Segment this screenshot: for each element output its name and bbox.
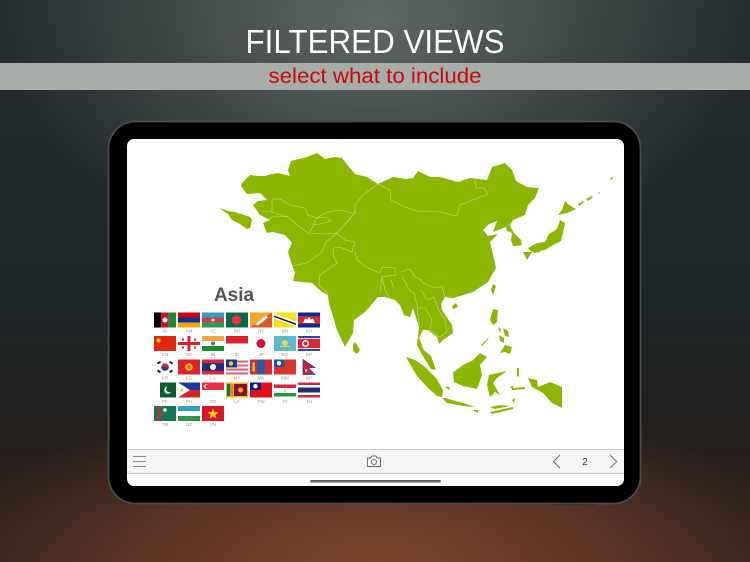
map of Asia <box>219 153 613 414</box>
flag country codes: AF <box>162 328 168 334</box>
Sri Lanka <box>353 342 360 354</box>
flag country codes: TH <box>306 399 312 404</box>
flag country codes: ID <box>235 352 240 357</box>
flag country codes: JP <box>258 352 264 357</box>
flag country codes: GE <box>186 352 192 357</box>
flag MM <box>274 360 296 374</box>
flag IN <box>202 336 224 351</box>
flag country codes: MN <box>258 376 264 380</box>
flag country codes: TM <box>162 422 168 427</box>
flag KP <box>298 336 320 351</box>
flag KZ <box>274 336 296 351</box>
Sulawesi <box>487 371 507 397</box>
flag KR <box>154 360 176 374</box>
Turkey and Caucasus <box>219 208 252 229</box>
flag country codes: CN <box>162 352 168 357</box>
flag JP <box>250 336 272 351</box>
flag TH <box>298 382 320 398</box>
flag country codes: TW <box>258 399 265 404</box>
subtitle band <box>0 63 750 90</box>
flag SG <box>202 382 224 390</box>
flag PK <box>154 382 176 398</box>
flag LA <box>202 360 224 374</box>
flag country codes: VN <box>210 422 216 427</box>
subtitle band: select what to include <box>268 65 482 88</box>
Japan <box>558 201 576 215</box>
flag country codes: PH <box>186 399 192 404</box>
flag country codes: UZ <box>186 422 192 427</box>
icon: previous arrow <box>554 455 560 468</box>
flag country codes: IN <box>211 352 215 357</box>
flag country codes: KH <box>306 328 312 334</box>
heading: Asia: Asia <box>214 285 254 306</box>
flag CN <box>154 336 176 351</box>
flag country codes: BN <box>282 328 288 334</box>
Java <box>442 398 475 407</box>
flag country codes: AZ <box>210 328 216 334</box>
flag country codes: NP <box>306 376 312 380</box>
flag country codes: MM <box>281 376 289 380</box>
Sumatra <box>406 357 443 397</box>
flag country codes: MY <box>234 376 240 380</box>
flag UZ <box>178 406 200 421</box>
Taiwan <box>491 284 496 295</box>
flag country codes: KR <box>162 376 169 380</box>
flag country codes: BD <box>234 328 241 334</box>
flag ID <box>226 336 248 344</box>
flag TW <box>250 382 272 398</box>
flag KG <box>178 360 200 374</box>
bottom toolbar <box>127 449 624 474</box>
flag country codes: PK <box>162 399 168 404</box>
flag KH <box>298 312 320 328</box>
flag country codes: TJ <box>282 399 288 404</box>
flag country codes: KG <box>186 376 193 380</box>
flag TM <box>154 406 176 421</box>
small Indonesian islands <box>445 368 525 414</box>
New Guinea <box>528 378 562 408</box>
flag country codes: KP <box>306 352 312 357</box>
Philippines <box>490 309 498 325</box>
screen <box>127 139 624 486</box>
flag country codes: AM <box>186 328 193 334</box>
flag AZ <box>202 312 224 328</box>
Hainan <box>452 303 458 309</box>
country borders <box>263 180 516 373</box>
title: FILTERED VIEWS <box>246 23 504 60</box>
icon: next arrow <box>610 455 616 468</box>
flag AF <box>154 312 176 328</box>
flag AM <box>178 312 200 328</box>
flag TJ <box>274 384 296 396</box>
flag GE <box>178 336 200 351</box>
flag BD <box>226 312 248 328</box>
flag country codes <box>162 328 312 427</box>
icon: camera <box>368 456 380 466</box>
tablet device <box>108 122 643 505</box>
flag MN <box>250 360 272 374</box>
flag PH <box>178 382 200 398</box>
flag grid <box>154 312 320 421</box>
flag VN <box>202 406 224 421</box>
flag LK <box>226 382 248 398</box>
flag BT <box>250 312 272 328</box>
Borneo <box>453 353 487 389</box>
flag MY <box>226 360 248 374</box>
flag country codes: LA <box>210 376 216 380</box>
page number: 2 <box>582 457 588 468</box>
flag country codes: KZ <box>282 352 288 357</box>
icon: menu <box>133 456 146 466</box>
Kuril islands <box>578 177 613 206</box>
home indicator <box>310 480 441 482</box>
flag BN <box>274 312 296 328</box>
flag country codes: SG <box>210 399 217 404</box>
flag country codes: BT <box>258 328 264 334</box>
flag NP <box>303 360 315 374</box>
flag country codes: LK <box>234 399 240 404</box>
